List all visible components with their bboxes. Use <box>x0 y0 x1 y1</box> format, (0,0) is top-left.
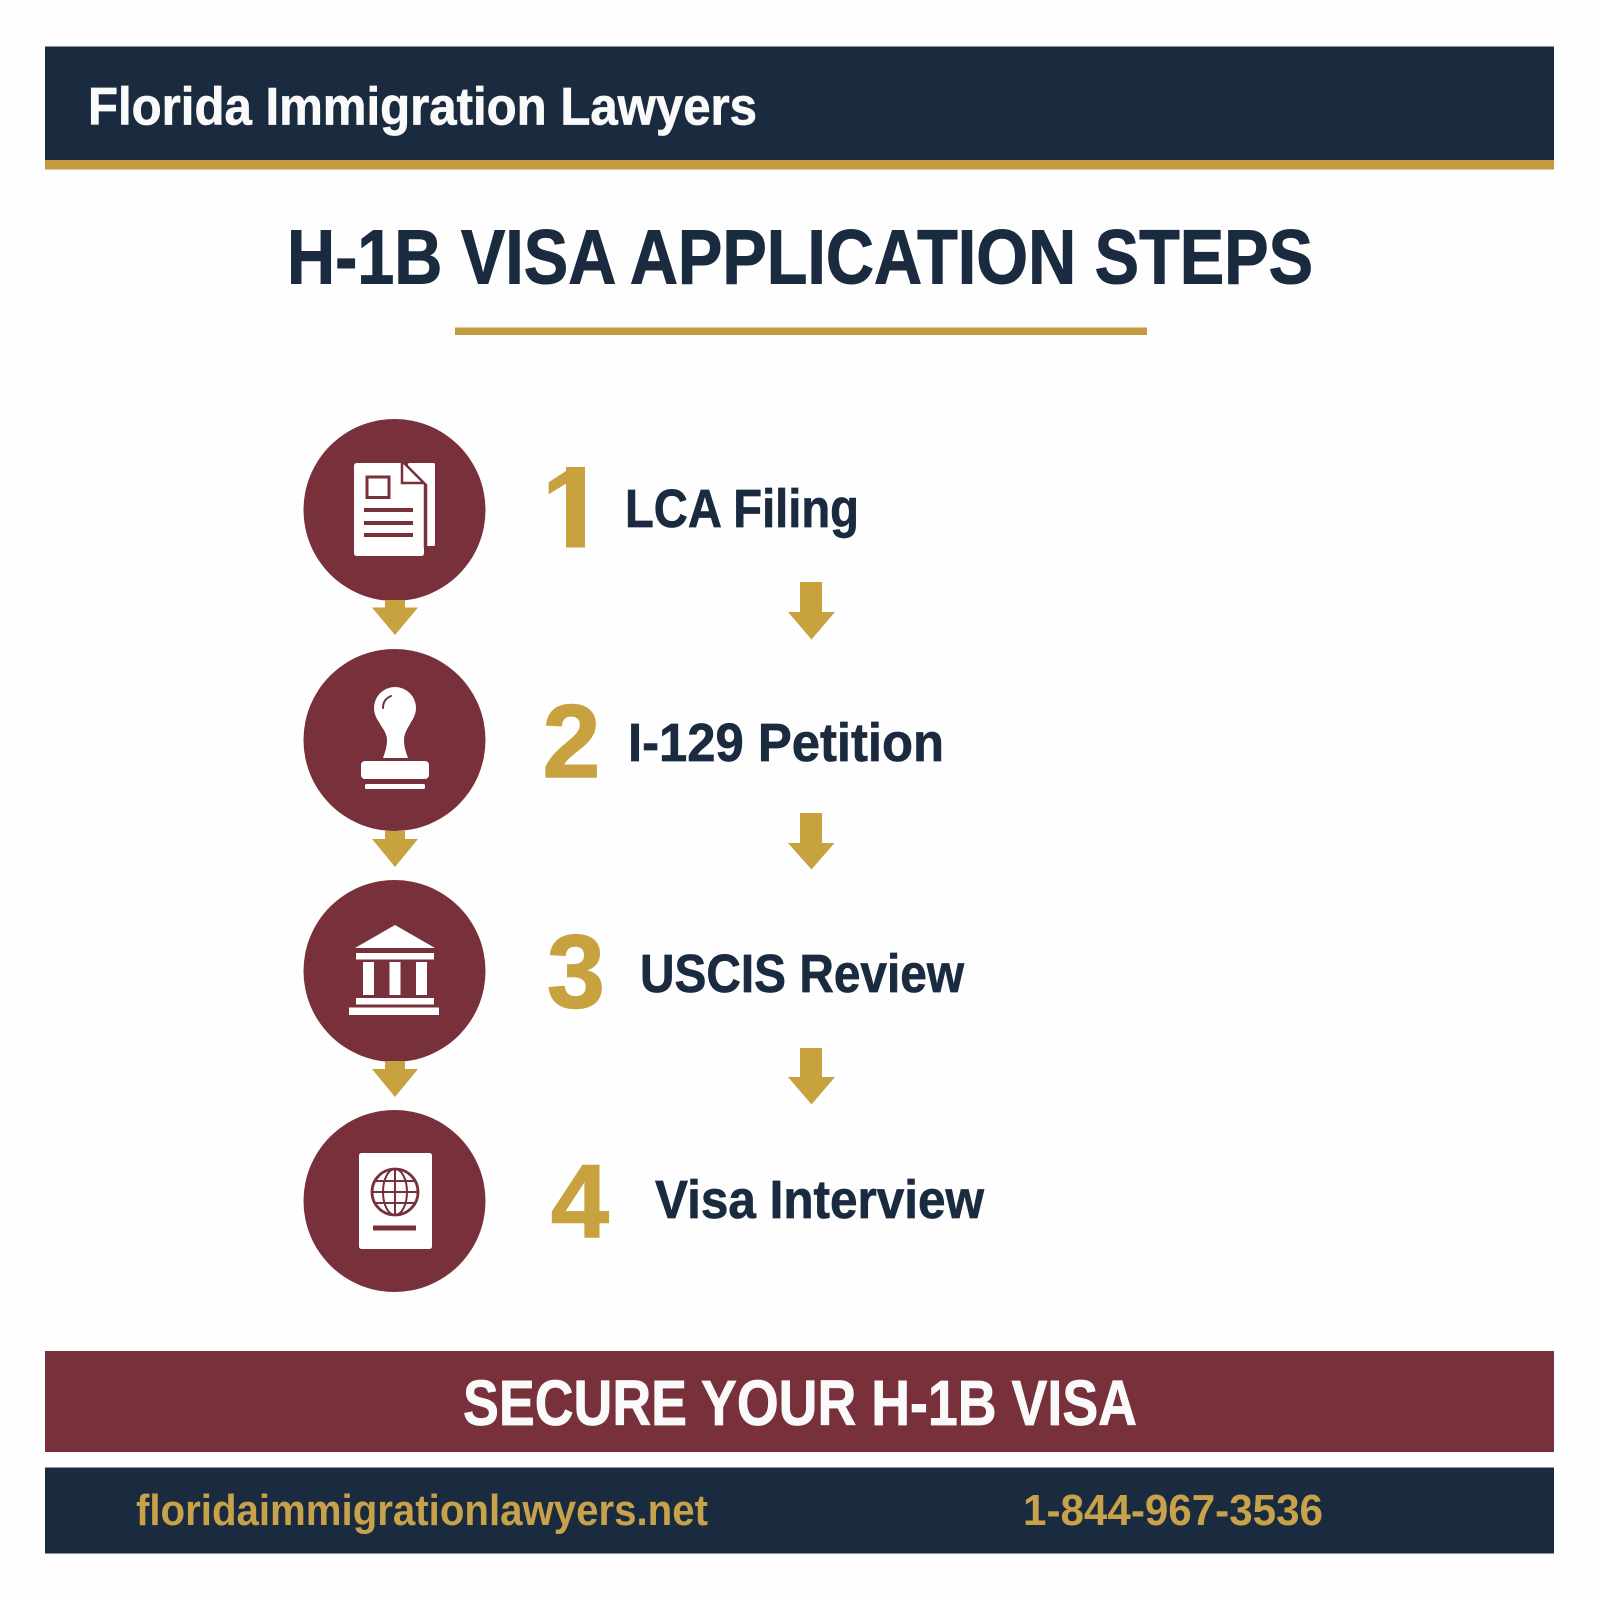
main title: H-1B VISA APPLICATION STEPS <box>287 214 1313 300</box>
step 1 number: 1 <box>541 446 603 571</box>
panel: call to action banner <box>45 1351 1554 1452</box>
footer background <box>45 1468 1554 1554</box>
brand name: Florida Immigration Lawyers <box>88 78 757 136</box>
step 1 circle icon: document <box>304 419 486 601</box>
step 3 label: USCIS Review <box>640 944 965 1004</box>
step 4 label: Visa Interview <box>655 1170 985 1230</box>
banner background <box>45 1351 1554 1452</box>
panel: step 4 Visa Interview <box>304 1110 985 1292</box>
step 4 number: 4 <box>551 1144 609 1260</box>
step 1 label: LCA Filing <box>625 479 859 539</box>
step 3 circle icon: government building <box>304 880 486 1062</box>
header background <box>45 46 1554 160</box>
arrow: left connector 1 <box>372 600 418 635</box>
title underline <box>455 328 1147 335</box>
arrow: left connector 2 <box>372 831 418 867</box>
step 3 number: 3 <box>547 914 605 1030</box>
panel: step 3 USCIS Review <box>304 880 965 1062</box>
header gold rule <box>45 160 1554 170</box>
panel: header banner <box>45 46 1554 170</box>
arrow: right connector 1 <box>788 582 835 640</box>
panel: contact footer <box>45 1468 1554 1554</box>
arrow: right connector 3 <box>788 1048 835 1104</box>
call to action text: SECURE YOUR H-1B VISA <box>463 1367 1137 1439</box>
arrow: right connector 2 <box>788 813 834 870</box>
panel: step 1 LCA Filing <box>304 419 859 601</box>
arrow: left connector 3 <box>372 1061 418 1097</box>
title block <box>287 214 1313 335</box>
step 2 label: I-129 Petition <box>628 713 944 773</box>
panel: step 2 I-129 Petition <box>304 649 944 831</box>
website: floridaimmigrationlawyers.net <box>136 1486 708 1535</box>
step 4 circle icon: passport <box>304 1110 486 1292</box>
phone number: 1-844-967-3536 <box>1023 1486 1323 1535</box>
step 2 circle icon: stamp <box>304 649 486 831</box>
step 2 number: 2 <box>542 684 600 800</box>
